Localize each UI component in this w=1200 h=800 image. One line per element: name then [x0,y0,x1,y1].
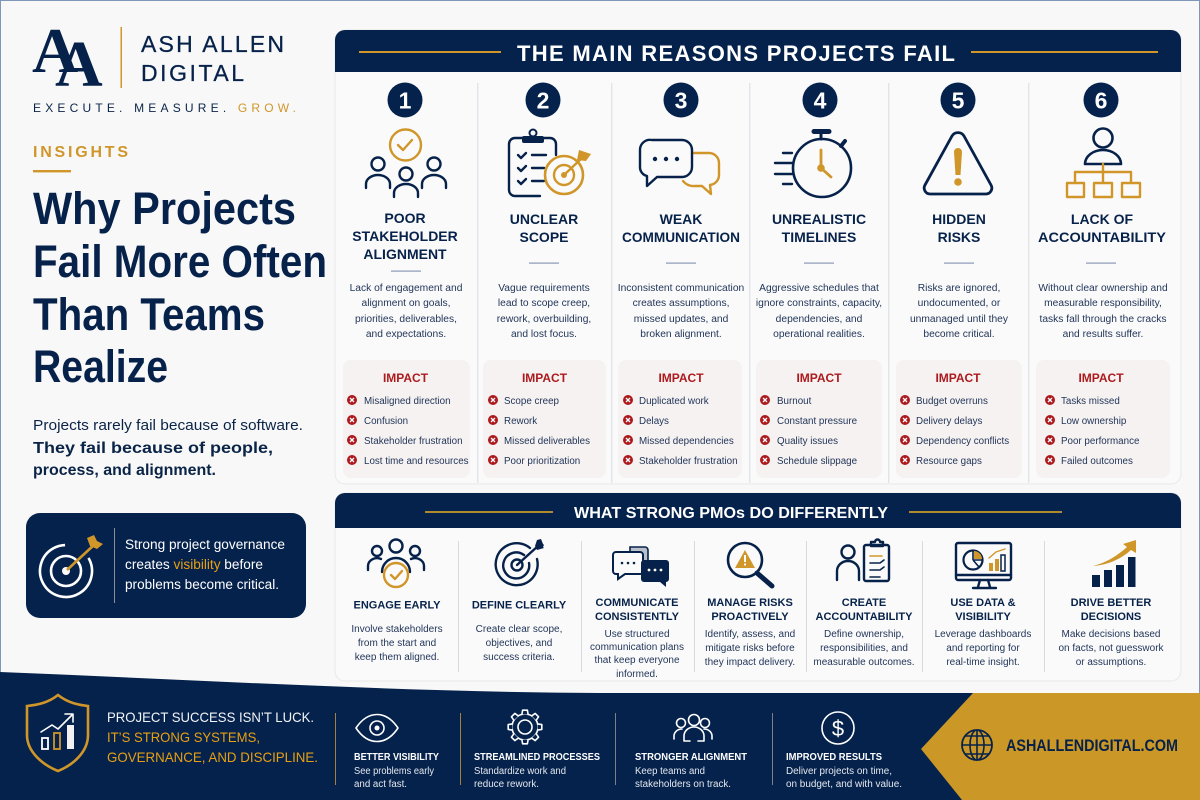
impact box 5: Dependency conflicts [916,436,1009,447]
impact box 4: Burnout [777,396,812,407]
practice: use data and visibility [935,543,1031,668]
benefit: streamlined processes: reduce rework. [474,779,539,790]
icon: people with check [366,130,446,197]
practice: create accountability [813,540,915,668]
reason 2: SCOPE [519,229,569,245]
practice: define clearly [472,539,567,663]
practice: manage risks proactively: Identify, assess, and [705,629,795,640]
practice: create accountability: measurable outcomes. [813,657,915,668]
practice: drive better decisions: on facts, not guesswork [1058,643,1165,654]
practice: create accountability: Define ownership, [824,629,904,640]
practice: communicate consistently [590,547,684,680]
benefit: better visibility [354,714,439,790]
reason 3: WEAK [660,211,702,227]
logo [32,15,296,115]
impact box 4 [756,360,882,478]
reason 4: operational realities. [773,329,865,340]
main title: Fail More Often [33,236,327,287]
practice: drive better decisions: Make decisions based [1062,629,1160,640]
benefit: stronger alignment: STRONGER ALIGNMENT [635,752,747,763]
practice: communicate consistently: Use structured [604,629,670,640]
icon: speech bubbles [640,140,719,194]
benefit: improved results: Deliver projects on time, [786,766,892,777]
reason 5: RISKS [938,229,980,245]
reason 6: 6 [1095,88,1107,114]
main title: Realize [33,341,168,392]
practice: drive better decisions: DRIVE BETTER [1071,597,1151,609]
reason 4 [756,82,882,478]
reason 1: and expectations. [366,329,446,340]
panel header: THE MAIN REASONS PROJECTS FAIL [517,41,955,66]
reason 5: become critical. [923,329,995,340]
reason 3: Inconsistent communication [618,283,745,294]
reason 2: 2 [537,88,549,114]
impact box 3: Duplicated work [639,396,709,407]
intro text: Projects rarely fail because of software. [33,417,303,434]
benefit: stronger alignment: Keep teams and [635,766,705,777]
impact box 6: Failed outcomes [1061,456,1133,467]
impact box 5: IMPACT [935,371,981,385]
icon: globe [962,730,992,760]
impact box 3: Delays [639,416,669,427]
benefit: stronger alignment: stakeholders on track. [635,779,731,790]
impact box 1: Stakeholder frustration [364,436,463,447]
practice: drive better decisions: or assumptions. [1076,657,1146,668]
practice: engage early [351,540,443,663]
practice: manage risks proactively: MANAGE RISKS [707,597,793,609]
logo: A [55,28,103,101]
impact box 4: Quality issues [777,436,838,447]
icon: checklist with target [509,130,591,196]
main title [33,183,327,392]
practice: drive better decisions [1058,540,1165,668]
logo: A [32,15,78,86]
icon: target [496,539,544,585]
reason 2: rework, overbuilding, [497,314,591,325]
main title: Why Projects [33,183,296,234]
footer message: GOVERNANCE, AND DISCIPLINE. [107,749,318,765]
reason 6: Without clear ownership and [1038,283,1168,294]
logo: EXECUTE. MEASURE. GROW. [33,101,296,115]
practice: create accountability: CREATE [842,597,886,609]
reason 2: lead to scope creep, [498,298,590,309]
reason 1: priorities, deliverables, [355,314,457,325]
benefit: improved results: on budget, and with value. [786,779,902,790]
practice: manage risks proactively: PROACTIVELY [711,611,789,623]
reason 5: unmanaged until they [910,314,1009,325]
callout: governance: creates visibility before [125,557,263,572]
practice: manage risks proactively: mitigate risks before [705,643,795,654]
impact box 1: Confusion [364,416,408,427]
impact box 4: IMPACT [796,371,842,385]
reason 6 [1036,82,1170,478]
practice: define clearly: success criteria. [483,652,555,663]
impact box 6: Low ownership [1061,416,1127,427]
impact box 6: IMPACT [1078,371,1124,385]
impact box 4: Constant pressure [777,416,858,427]
reason 6: LACK OF [1071,211,1134,227]
icon: shield with chart [27,695,88,771]
icon: chat bubbles [613,547,669,587]
benefit: improved results [786,712,902,790]
icon: dashboard monitor [956,543,1011,588]
icon: magnifier with warning [728,543,772,586]
intro text: They fail because of people, [33,440,273,457]
reason 2 [483,82,606,478]
reason 6: measurable responsibility, [1044,298,1162,309]
impact box 6 [1036,360,1170,478]
practice: use data and visibility: VISIBILITY [955,611,1011,623]
impact box 1: Misaligned direction [364,396,451,407]
footer message [107,709,318,765]
practice: communicate consistently: COMMUNICATE [596,597,678,609]
impact box 5: Budget overruns [916,396,988,407]
reason 1 [343,82,470,478]
reason 3: 3 [675,88,687,114]
impact box 3: Stakeholder frustration [639,456,738,467]
benefit: streamlined processes: STREAMLINED PROCESSES [474,752,600,763]
reason 4: Aggressive schedules that [759,283,879,294]
practice: use data and visibility: USE DATA & [950,597,1016,609]
logo: DIGITAL [141,60,244,86]
benefit: streamlined processes: Standardize work and [474,766,566,777]
reason 1: POOR [384,210,426,226]
impact box 2 [483,360,606,478]
reason 5: HIDDEN [932,211,986,227]
icon: warning triangle [924,133,992,194]
impact box 2: Missed deliverables [504,436,590,447]
reason 4: TIMELINES [782,229,856,245]
reason 2: Vague requirements [498,283,590,294]
logo: ASH ALLEN [141,31,284,57]
reason 3: missed updates, and [634,314,729,325]
reason 5: undocumented, or [918,298,1001,309]
impact box 3: Missed dependencies [639,436,734,447]
benefit: better visibility: and act fast. [354,779,407,790]
benefit: better visibility: See problems early [354,766,434,777]
reason 1: 1 [399,88,412,114]
eyebrow: insights: INSIGHTS [33,144,128,161]
reason 4: dependencies, and [776,314,863,325]
practice: create accountability: responsibilities, and [820,643,908,654]
panel header: WHAT STRONG PMOs DO DIFFERENTLY [574,505,888,522]
callout: governance: Strong project governance [125,537,285,552]
impact box 4: Schedule slippage [777,456,858,467]
reason 3 [618,82,745,478]
icon: org chart [1067,128,1140,197]
impact box 5: Resource gaps [916,456,982,467]
icon: target with arrow [30,535,103,607]
impact box 1: IMPACT [383,371,429,385]
reason 2: and lost focus. [511,329,577,340]
impact box 6: Tasks missed [1061,396,1120,407]
footer message: IT’S STRONG SYSTEMS, [107,729,260,745]
icon: team with check [368,540,424,587]
benefit: streamlined processes [474,710,600,790]
impact box 2: IMPACT [522,371,568,385]
website badge: ASHALLENDIGITAL.COM [1006,737,1178,755]
benefit: stronger alignment [635,714,747,790]
practice: manage risks proactively [705,543,795,668]
reason 1: Lack of engagement and [350,283,463,294]
panel header [335,30,1181,72]
practice: manage risks proactively: they impact delivery. [705,657,795,668]
intro text: process, and alignment. [33,462,216,479]
panel: main reasons [335,30,1181,484]
impact box 5 [896,360,1022,478]
practice: communicate consistently: that keep everyone [594,655,680,666]
practice: define clearly: DEFINE CLEARLY [472,600,567,612]
footer band [0,672,1200,800]
practice: use data and visibility: real-time insight. [946,657,1020,668]
reason 1: STAKEHOLDER [352,228,458,244]
benefit: better visibility: BETTER VISIBILITY [354,752,439,763]
icon: person and clipboard [837,540,889,581]
practice: use data and visibility: Leverage dashboards [935,629,1031,640]
callout: governance: problems become critical. [125,577,279,592]
impact box 5: Delivery delays [916,416,983,427]
practice: communicate consistently: informed. [616,669,658,680]
eyebrow: insights [33,144,128,172]
reason 3: broken alignment. [640,329,722,340]
practice: engage early: Involve stakeholders [351,624,443,635]
practice: create accountability: ACCOUNTABILITY [816,611,913,623]
practice: engage early: ENGAGE EARLY [353,600,441,612]
benefit: improved results: $ [832,716,844,741]
impact box 2: Rework [504,416,537,427]
panel header [335,493,1181,528]
practice: define clearly: Create clear scope, [476,624,562,635]
practice: engage early: keep them aligned. [355,652,439,663]
main title: Than Teams [33,289,265,340]
reason 3: COMMUNICATION [622,229,740,245]
practice: use data and visibility: and reporting for [946,643,1020,654]
reason 5: 5 [952,88,965,114]
impact box 3 [618,360,742,478]
reason 4: 4 [814,88,827,114]
reason 1: ALIGNMENT [363,246,447,262]
practice: engage early: from the start and [358,638,436,649]
impact box 6: Poor performance [1061,436,1140,447]
footer message: PROJECT SUCCESS ISN’T LUCK. [107,709,314,725]
reason 6: tasks fall through the cracks [1039,314,1167,325]
reason 1: alignment on goals, [362,298,450,309]
reason 5 [896,82,1022,478]
reason 3: creates assumptions, [633,298,729,309]
reason 4: ignore constraints, capacity, [756,298,882,309]
benefit: improved results: IMPROVED RESULTS [786,752,882,763]
icon: stopwatch [775,132,851,197]
practice: communicate consistently: communication plans [590,642,684,653]
icon: growth bars with arrow [1092,540,1136,587]
panel: what strong PMOs do differently [335,493,1181,681]
impact box 1 [343,360,470,478]
impact box 2: Poor prioritization [504,456,580,467]
reason 5: Risks are ignored, [918,283,1000,294]
practice: define clearly: objectives, and [486,638,552,649]
callout: governance [26,513,306,618]
reason 6: ACCOUNTABILITY [1038,229,1167,245]
impact box 1: Lost time and resources [364,456,469,467]
practice: communicate consistently: CONSISTENTLY [595,611,680,623]
website badge [921,693,1200,800]
reason 6: and results suffer. [1063,329,1143,340]
reason 4: UNREALISTIC [772,211,866,227]
intro text [33,417,303,479]
reason 2: UNCLEAR [510,211,578,227]
practice: drive better decisions: DECISIONS [1081,611,1141,623]
impact box 2: Scope creep [504,396,560,407]
impact box 3: IMPACT [658,371,704,385]
